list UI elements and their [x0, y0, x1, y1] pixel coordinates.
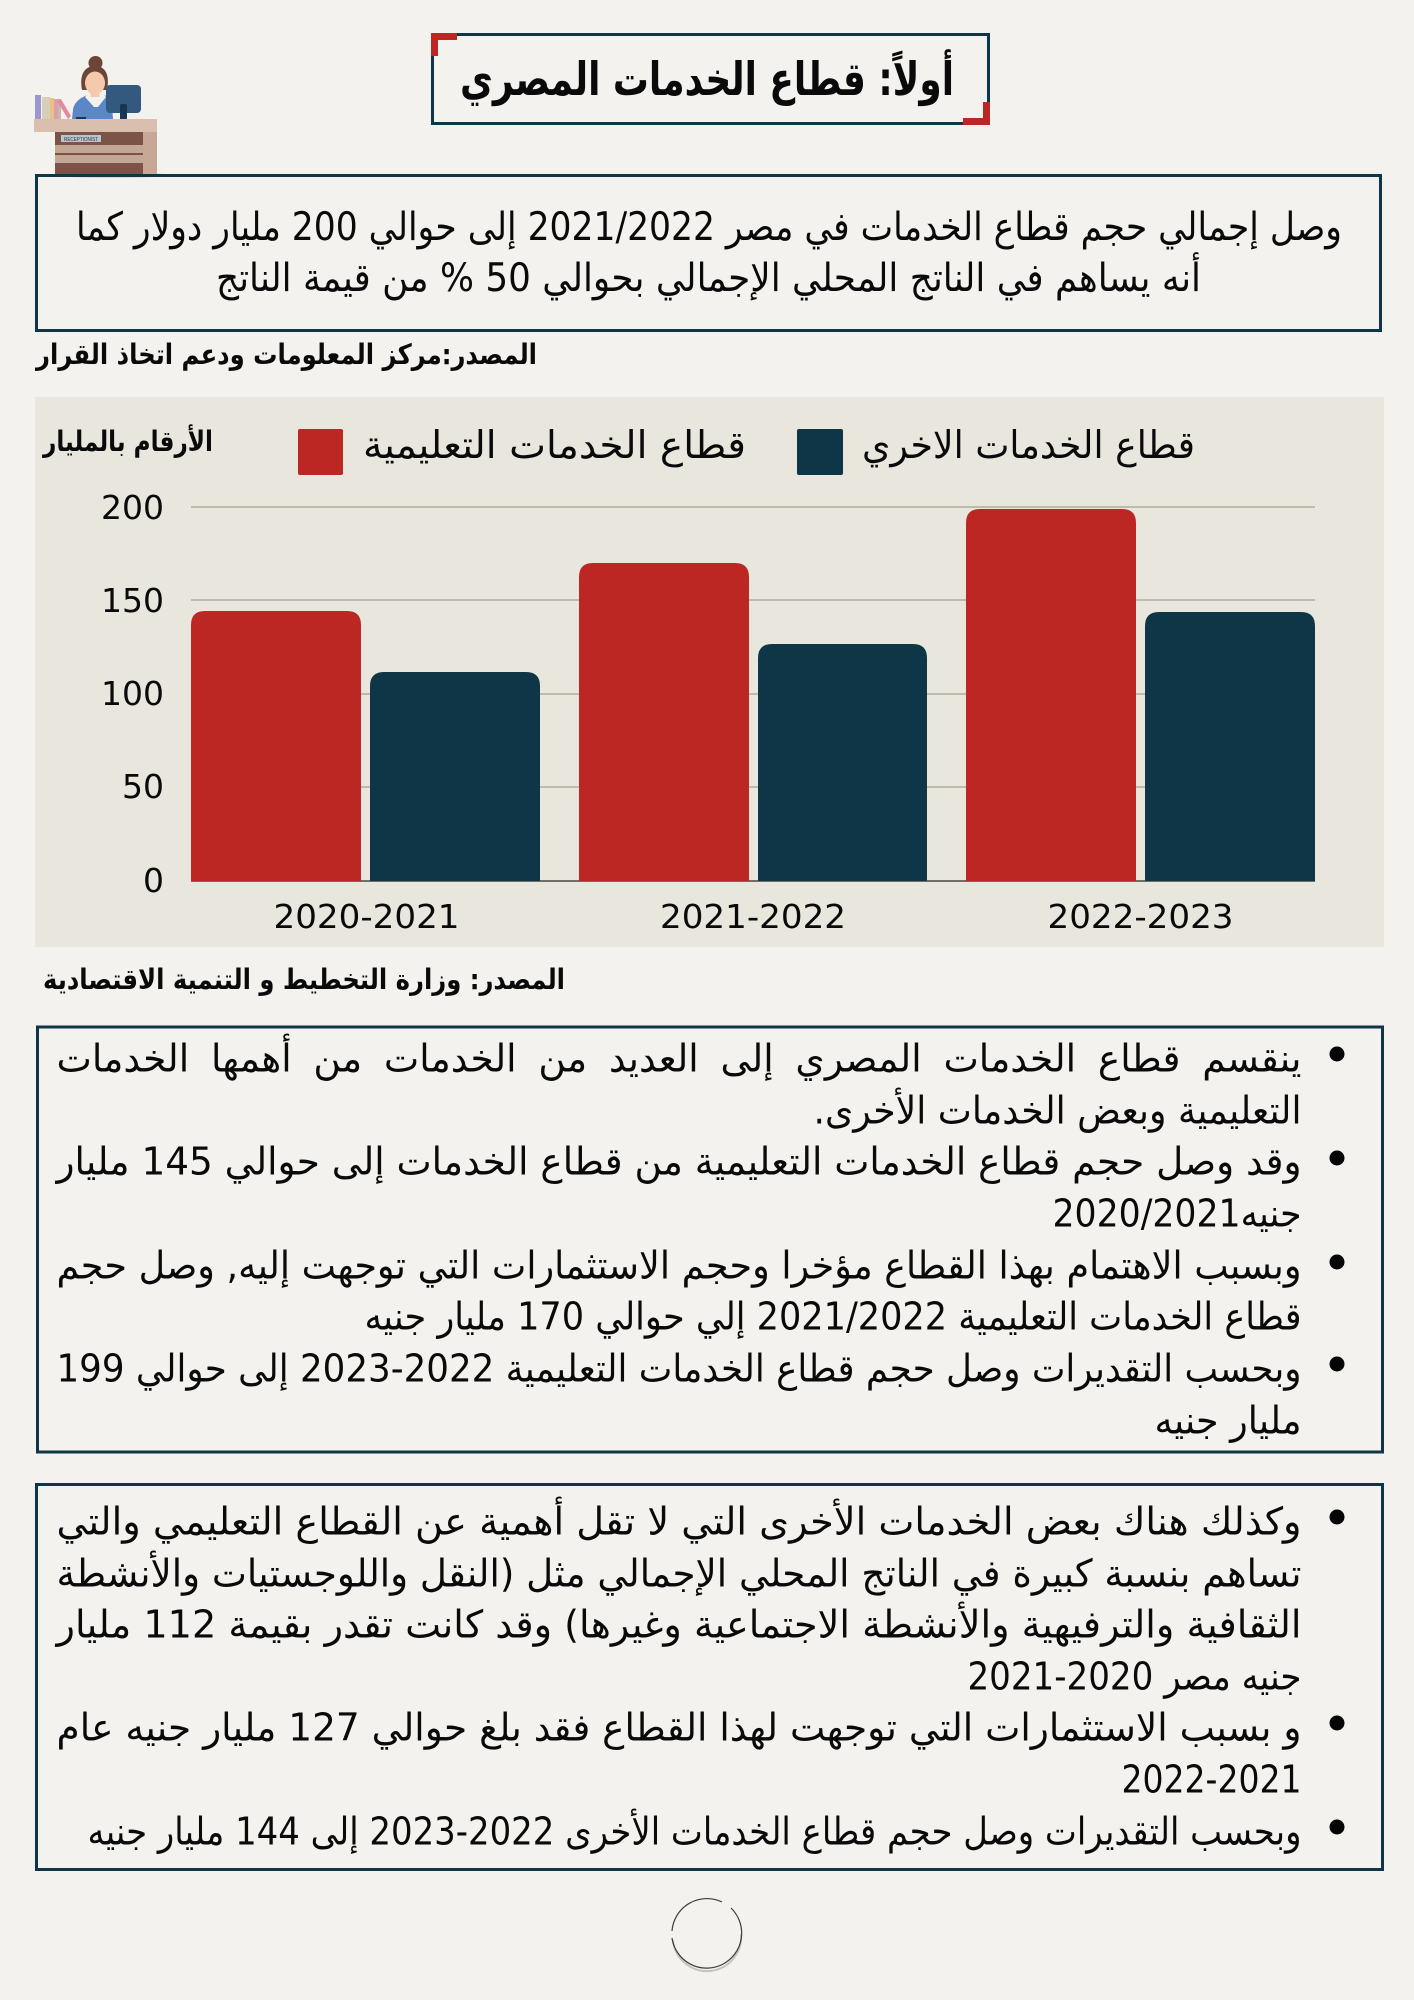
panel: bar chart [35, 397, 1384, 947]
chart unit label: الأرقام بالمليار [41, 424, 213, 458]
bullet list: other services: 2022-2021 [1122, 1758, 1302, 1802]
icon: receptionist at desk [34, 56, 167, 178]
summary text: أنه يساهم في الناتج المحلي الإجمالي بحوالي 50 % من قيمة الناتج [216, 252, 1201, 301]
bars: 2022-2023 [966, 509, 1315, 881]
summary text [76, 205, 1342, 301]
bullet list: other services: جنيه مصر 2020-2021 [968, 1654, 1302, 1700]
bullet list: education services [55, 1034, 1345, 1442]
bars: 2020-2021 [191, 611, 540, 881]
x axis labels: 2021-2022 [660, 897, 846, 936]
legend: قطاع الخدمات الاخري [862, 423, 1195, 468]
bullet list: other services: وكذلك هناك بعض الخدمات الأخرى التي لا تقل أهمية عن القطاع التعليمي والتي [56, 1496, 1302, 1544]
bullet list: education services: مليار جنيه [1154, 1398, 1302, 1442]
panel: summary box [36, 176, 1380, 330]
bullet list: education services: وبحسب التقديرات وصل حجم قطاع الخدمات التعليمية 2022-2023 إلى حوالي 199 [57, 1346, 1302, 1392]
bullet list: education services: وبسبب الاهتمام بهذا القطاع مؤخرا وحجم الاستثمارات التي توجهت إليه, وصل حجم [56, 1244, 1302, 1288]
legend [298, 423, 1195, 475]
title box [431, 33, 990, 125]
y axis labels: 0 [143, 861, 164, 900]
title text: أولاً: قطاع الخدمات المصري [460, 49, 954, 106]
bullet list: education services: ينقسم قطاع الخدمات المصري إلى العديد من الخدمات من أهمها الخدمات [56, 1034, 1302, 1082]
y axis labels: 150 [101, 581, 164, 620]
x axis labels: 2022-2023 [1048, 897, 1234, 936]
y axis labels: 200 [101, 488, 164, 527]
y axis labels: 50 [122, 767, 164, 806]
bullet list: education services: التعليمية وبعض الخدمات الأخرى. [814, 1086, 1302, 1134]
bullet list: other services: و بسبب الاستثمارات التي توجهت لهذا القطاع فقد بلغ حوالي 127 مليار جنيه عام [56, 1706, 1302, 1750]
bullet list: other services: تساهم بنسبة كبيرة في الناتج المحلي الإجمالي مثل (النقل واللوجستيات والأنشطة [56, 1550, 1302, 1596]
summary text: وصل إجمالي حجم قطاع الخدمات في مصر 2021/2022 إلى حوالي 200 مليار دولار كما [76, 205, 1342, 250]
panel: other services text [36, 1484, 1382, 1870]
bullet list: education services: وقد وصل حجم قطاع الخدمات التعليمية من قطاع الخدمات إلى حوالي 145 مليار [55, 1140, 1302, 1184]
y axis labels [101, 488, 164, 900]
bars: 2021-2022 [579, 563, 927, 881]
bullet list: education services: جنيه2020/2021 [1052, 1192, 1302, 1236]
source note 2: المصدر: وزارة التخطيط و التنمية الاقتصادية [43, 963, 565, 996]
page number circle [672, 1899, 742, 1971]
bullet list: other services: وبحسب التقديرات وصل حجم قطاع الخدمات الأخرى 2022-2023 إلى 144 مليار جنيه [88, 1808, 1302, 1854]
legend: قطاع الخدمات التعليمية [363, 423, 746, 467]
y axis labels: 100 [101, 674, 164, 713]
source note 1: المصدر:مركز المعلومات ودعم اتخاذ القرار [34, 338, 537, 371]
x axis labels [274, 897, 1234, 936]
receptionist sign: RECEPTIONIST [64, 137, 98, 143]
bullet list: other services: الثقافية والترفيهية والأنشطة الاجتماعية وغيرها) وقد كانت تقدر بقيمة 112 مليار [54, 1600, 1302, 1648]
bullet list: education services: قطاع الخدمات التعليمية 2021/2022 إلي حوالي 170 مليار جنيه [364, 1294, 1302, 1340]
bullet list: other services [54, 1496, 1345, 1854]
x axis labels: 2020-2021 [274, 897, 460, 936]
panel: education services text [38, 1027, 1382, 1452]
